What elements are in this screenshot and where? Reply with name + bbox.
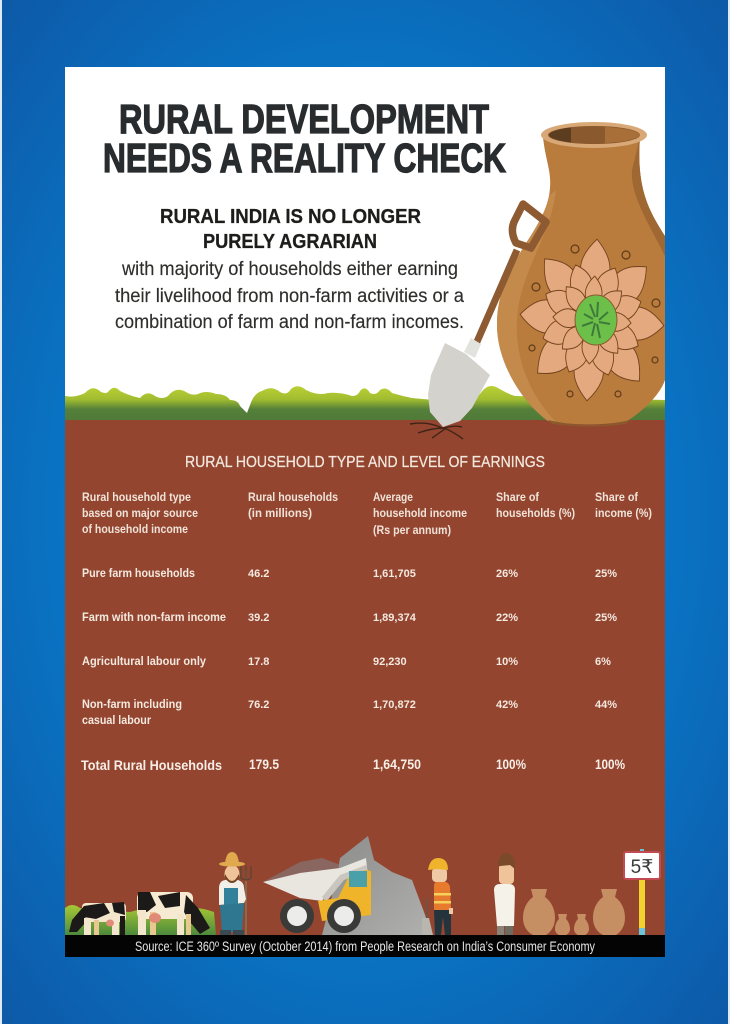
- row: agricultural labour only: 6%: [595, 656, 611, 668]
- row: agricultural labour only: [82, 656, 611, 668]
- row: pure farm households: 1,61,705: [373, 568, 416, 580]
- row: agricultural labour only: Agricultural labour only: [82, 654, 206, 668]
- table header: Average: [373, 490, 413, 504]
- table header: based on major source: [82, 506, 198, 520]
- table header: income (%): [595, 506, 652, 520]
- illustration: potter: [494, 853, 515, 935]
- row: total rural households: 1,64,750: [373, 757, 421, 772]
- soil cracks: [410, 423, 463, 439]
- row: pure farm households: 25%: [595, 568, 617, 580]
- icon: clay vase with flower: [497, 122, 669, 426]
- subheading: PURELY AGRARIAN: [203, 231, 377, 253]
- title: NEEDS A REALITY CHECK: [103, 135, 506, 181]
- illustration: clay pots: [523, 889, 625, 935]
- row: pure farm households: [82, 568, 617, 579]
- grass strip: [65, 386, 665, 420]
- table header: household income: [373, 506, 467, 520]
- row: pure farm households: Pure farm households: [82, 566, 195, 580]
- illustration: grazing cows: [65, 892, 216, 935]
- table header: [82, 490, 652, 537]
- table header: (Rs per annum): [373, 523, 451, 537]
- row: total rural households: 100%: [496, 757, 526, 772]
- cow left: [69, 902, 126, 935]
- intro text: [115, 259, 464, 333]
- table header: (in millions): [248, 506, 312, 520]
- table title: RURAL HOUSEHOLD TYPE AND LEVEL OF EARNINGS: [185, 454, 545, 471]
- vase rim: [541, 122, 647, 148]
- row: total rural households: 179.5: [249, 757, 279, 772]
- illustration: rock pile: [322, 836, 432, 935]
- row: non-farm including casual labour: 42%: [496, 699, 518, 711]
- row: non-farm including casual labour: casual labour: [82, 713, 151, 727]
- source footer bar: Source: ICE 360º Survey (October 2014) from People Research on India’s Consumer Economy: [135, 939, 595, 954]
- icon: five rupee sign: 5₹: [631, 857, 653, 878]
- subheading: RURAL INDIA IS NO LONGER: [160, 206, 422, 228]
- flower centre: [575, 295, 617, 345]
- row: farm with non-farm income: 1,89,374: [373, 612, 417, 624]
- intro text: their livelihood from non-farm activities or a: [115, 286, 464, 307]
- row: agricultural labour only: 10%: [496, 656, 518, 668]
- icon: shovel: [410, 204, 546, 439]
- cow right: [137, 892, 210, 935]
- intro text: combination of farm and non-farm incomes.: [115, 312, 464, 333]
- row: pure farm households: 26%: [496, 568, 518, 580]
- row: farm with non-farm income: 25%: [595, 612, 617, 624]
- row: non-farm including casual labour: 44%: [595, 699, 617, 711]
- row: non-farm including casual labour: Non-farm including: [82, 697, 182, 711]
- title: [104, 104, 507, 174]
- row: total rural households: [81, 760, 625, 772]
- table header: Share of: [595, 490, 639, 504]
- table header: households (%): [496, 506, 575, 520]
- source footer bar: [65, 935, 665, 957]
- row: total rural households: 100%: [595, 757, 625, 772]
- row: total rural households: Total Rural Households: [81, 758, 222, 773]
- panel: infographic card: [65, 67, 669, 957]
- row: farm with non-farm income: 22%: [496, 612, 518, 624]
- row: non-farm including casual labour: [82, 699, 617, 724]
- row: non-farm including casual labour: 1,70,872: [373, 699, 416, 711]
- table header: of household income: [82, 522, 188, 536]
- flower motif: [520, 238, 664, 402]
- illustration: yellow loader: [263, 858, 371, 933]
- table header: Rural households: [248, 490, 338, 504]
- row: agricultural labour only: 17.8: [248, 656, 269, 668]
- row: non-farm including casual labour: 76.2: [248, 699, 269, 711]
- soil panel: [65, 420, 665, 935]
- row: farm with non-farm income: [82, 612, 617, 623]
- intro text: with majority of households either earning: [121, 259, 458, 280]
- title: RURAL DEVELOPMENT: [119, 96, 489, 142]
- illustration: construction worker: [422, 858, 453, 935]
- illustration: farmer with pitchfork: [219, 852, 251, 935]
- vase swirls: [529, 245, 660, 397]
- row: farm with non-farm income: Farm with non-farm income: [82, 610, 226, 624]
- table header: Rural household type: [82, 490, 191, 504]
- icon: five rupee sign: [624, 849, 660, 935]
- row: agricultural labour only: 92,230: [373, 656, 407, 668]
- row: farm with non-farm income: 39.2: [248, 612, 269, 624]
- subheading: [161, 208, 421, 248]
- table header: Share of: [496, 490, 540, 504]
- row: pure farm households: 46.2: [248, 568, 269, 580]
- table: household types and earnings: [81, 490, 652, 773]
